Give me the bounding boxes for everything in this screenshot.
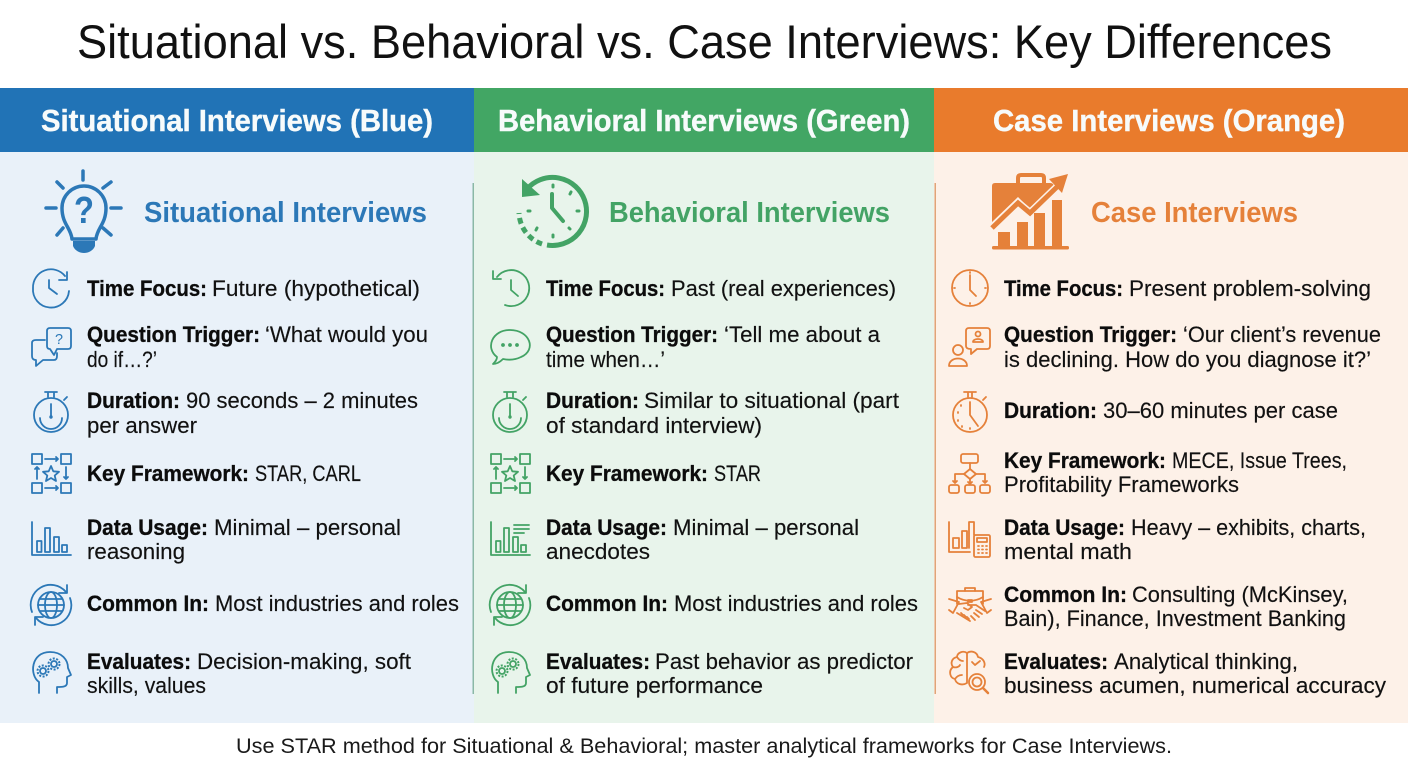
row: question trigger: ‘Our client’s revenue [1183, 322, 1381, 347]
row: common in: Bain), Finance, Investment Banking [1004, 606, 1346, 631]
row: duration: Similar to situational (part [644, 388, 900, 413]
row: time focus: Time Focus: [87, 276, 207, 301]
panel: behavioral interviews [474, 88, 934, 723]
row: question trigger: ? [55, 331, 63, 348]
icon: clock with backward arrow [519, 177, 587, 245]
row: evaluates: Evaluates: [87, 649, 191, 674]
row: evaluates: Analytical thinking, [1114, 649, 1298, 674]
row: data usage: Data Usage: [1004, 515, 1125, 540]
row: key framework: Profitability Frameworks [1004, 472, 1239, 497]
row: data usage: Data Usage: [87, 515, 208, 540]
row: question trigger: ‘Tell me about a [724, 322, 880, 347]
row: time focus [493, 270, 896, 306]
row: common in [949, 582, 1348, 631]
subheading: situational: Situational Interviews [144, 197, 427, 229]
row: data usage: Minimal – personal [214, 515, 401, 540]
row: key framework [491, 454, 761, 493]
icon: briefcase with growth chart [992, 174, 1069, 250]
row: question trigger: time when…’ [546, 347, 665, 372]
row: question trigger: Question Trigger: [1004, 322, 1177, 347]
row: question trigger: Question Trigger: [546, 322, 718, 347]
row: duration: 90 seconds – 2 minutes [186, 388, 418, 413]
row: data usage: anecdotes [546, 539, 650, 564]
row: duration: per answer [87, 413, 197, 438]
row: duration: Duration: [87, 388, 180, 413]
row: evaluates: business acumen, numerical accuracy [1004, 673, 1387, 698]
icon: lightbulb with question mark [46, 171, 121, 253]
header band: case [934, 88, 1408, 152]
row: question trigger [949, 322, 1381, 372]
row: evaluates: of future performance [546, 673, 763, 698]
row: key framework: Key Framework: [1004, 448, 1166, 473]
row: duration [953, 392, 1338, 432]
row: key framework: Key Framework: [87, 461, 249, 486]
row: duration: Duration: [546, 388, 639, 413]
row: evaluates: Decision-making, soft [197, 649, 412, 674]
title: Situational vs. Behavioral vs. Case Interviews: Key Differences [77, 15, 1332, 68]
row: data usage: mental math [1004, 539, 1132, 564]
row: data usage [491, 515, 859, 564]
row: question trigger: ‘What would you [265, 322, 428, 347]
subheading: case: Case Interviews [1091, 197, 1298, 229]
row: question trigger: Question Trigger: [87, 322, 260, 347]
row: duration: Duration: [1004, 398, 1097, 423]
row: common in: Common In: [546, 591, 668, 616]
row: time focus: Time Focus: [1004, 276, 1123, 301]
row: question trigger [32, 322, 428, 372]
row: data usage: reasoning [87, 539, 185, 564]
row: data usage: Data Usage: [546, 515, 667, 540]
footer note: Use STAR method for Situational & Behavioral; master analytical frameworks for Case Interviews. [236, 734, 1172, 758]
row: question trigger: do if…?’ [87, 347, 157, 372]
row: time focus: Present problem-solving [1129, 276, 1371, 301]
row: evaluates [33, 649, 412, 698]
header band: situational [0, 88, 474, 152]
icon: lightbulb with question mark: ? [74, 190, 94, 232]
row: time focus: Time Focus: [546, 276, 665, 301]
row: common in [490, 585, 918, 625]
row: key framework: Key Framework: [546, 461, 708, 486]
panel: situational interviews [0, 88, 474, 723]
row: common in [31, 585, 459, 625]
row: evaluates: Past behavior as predictor [655, 649, 913, 674]
row: duration: 30–60 minutes per case [1103, 398, 1338, 423]
row: common in: Common In: [1004, 582, 1127, 607]
row: duration [34, 388, 418, 438]
header band: behavioral [474, 88, 934, 152]
row: common in: Consulting (McKinsey, [1132, 582, 1348, 607]
row: data usage [32, 515, 401, 564]
header band: case: Case Interviews (Orange) [993, 103, 1345, 138]
row: evaluates [492, 649, 913, 698]
row: time focus [952, 270, 1371, 306]
row: duration [493, 388, 900, 438]
row: key framework: STAR [714, 461, 761, 486]
row: common in: Most industries and roles [215, 591, 459, 616]
row: duration: of standard interview) [546, 413, 762, 438]
subheading: behavioral: Behavioral Interviews [609, 197, 890, 229]
row: key framework: STAR, CARL [255, 461, 361, 486]
row: evaluates: skills, values [87, 673, 206, 698]
row: key framework [949, 448, 1347, 497]
row: common in: Most industries and roles [674, 591, 918, 616]
row: question trigger [491, 322, 880, 372]
row: data usage: Minimal – personal [673, 515, 859, 540]
row: key framework: MECE, Issue Trees, [1172, 448, 1347, 473]
row: question trigger: is declining. How do you diagnose it?’ [1004, 347, 1371, 372]
header band: behavioral: Behavioral Interviews (Green) [498, 103, 910, 138]
row: key framework [32, 454, 361, 493]
row: data usage [949, 515, 1366, 564]
row: evaluates [950, 649, 1387, 698]
row: data usage: Heavy – exhibits, charts, [1131, 515, 1366, 540]
row: time focus [33, 269, 420, 308]
row: time focus: Future (hypothetical) [212, 276, 420, 301]
header band: situational: Situational Interviews (Blue) [41, 103, 433, 138]
row: evaluates: Evaluates: [1004, 649, 1108, 674]
row: evaluates: Evaluates: [546, 649, 650, 674]
panel: case interviews [934, 88, 1408, 723]
row: common in: Common In: [87, 591, 209, 616]
row: time focus: Past (real experiences) [671, 276, 896, 301]
